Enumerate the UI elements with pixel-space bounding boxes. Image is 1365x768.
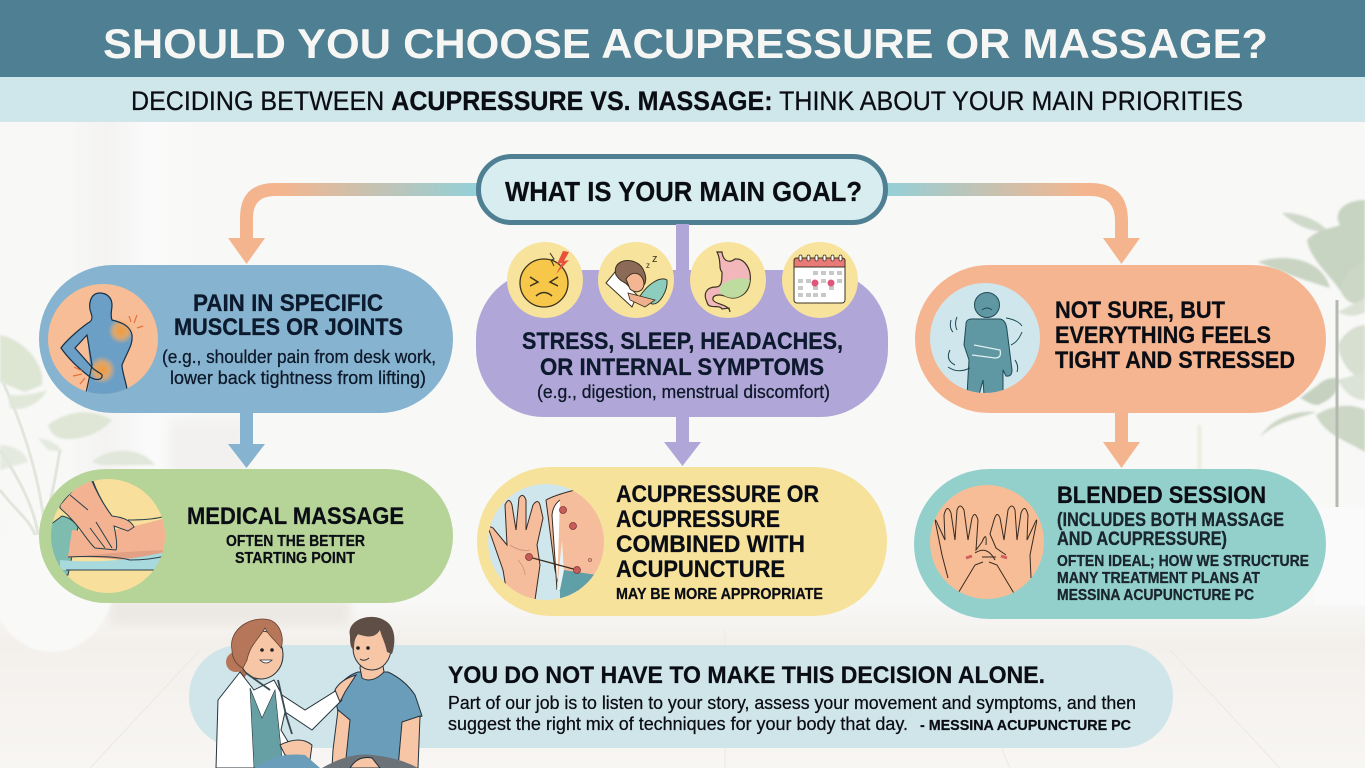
icon: person sleeping (598, 242, 674, 318)
blended heading: AND ACUPRESSURE) (1057, 528, 1227, 550)
icon: person sleeping: z (646, 261, 650, 270)
pain examples (162, 346, 436, 388)
pain heading: MUSCLES OR JOINTS (174, 314, 403, 341)
icon: body with pain spots (48, 284, 158, 395)
acupressure heading: ACUPRESSURE OR (616, 481, 819, 508)
subtitle banner (0, 77, 1365, 122)
acupressure note: MAY BE MORE APPROPRIATE (616, 586, 823, 603)
title banner (0, 0, 1365, 77)
illustration: practitioner and patient (216, 617, 422, 768)
panel: closing callout (189, 617, 1173, 768)
stress heading (522, 328, 843, 381)
panel: acupressure or acupressure combined with acupuncture (477, 467, 887, 616)
blended heading: BLENDED SESSION (1057, 482, 1266, 509)
arrow: not sure to blended session (1103, 410, 1140, 468)
callout body: suggest the right mix of techniques for your body that day. (448, 714, 908, 734)
pain heading (174, 290, 403, 341)
blended note: OFTEN IDEAL; HOW WE STRUCTURE (1057, 553, 1309, 570)
panel: pain in specific muscles or joints (39, 265, 453, 413)
medical massage note: OFTEN THE BETTER (226, 533, 365, 550)
icon: tense figure (930, 283, 1040, 395)
pain examples: (e.g., shoulder pain from desk work, (162, 346, 436, 367)
arrow: goal to pain branch (228, 183, 478, 264)
pain heading: PAIN IN SPECIFIC (193, 290, 383, 317)
blended heading (1057, 482, 1284, 550)
acupressure heading (616, 481, 819, 583)
arrow: pain to medical massage (228, 410, 265, 468)
panel: stress, sleep, headaches or internal symptoms (476, 224, 888, 417)
acupressure heading: ACUPUNCTURE (616, 556, 785, 583)
acupressure heading: ACUPRESSURE (616, 506, 780, 533)
icon: headache face (507, 242, 583, 318)
icon: stomach (690, 242, 766, 318)
panel: blended session (914, 469, 1326, 619)
medical massage note (226, 533, 365, 567)
icon: menstrual calendar (782, 242, 858, 318)
callout body: Part of our job is to listen to your story, assess your movement and symptoms, and then (448, 693, 1136, 713)
stress heading: STRESS, SLEEP, HEADACHES, (522, 328, 843, 355)
acupressure heading: COMBINED WITH (616, 531, 805, 558)
stress heading: OR INTERNAL SYMPTOMS (540, 354, 824, 381)
medical massage heading: MEDICAL MASSAGE (187, 503, 404, 530)
callout body (448, 693, 1136, 734)
callout heading: YOU DO NOT HAVE TO MAKE THIS DECISION ALONE. (448, 662, 1045, 689)
icon: acupoints on hand and shoulder (488, 484, 610, 600)
icon: massage hands (50, 479, 165, 593)
callout body: - MESSINA ACUPUNCTURE PC (920, 717, 1131, 734)
pain examples: lower back tightness from lifting) (170, 367, 426, 388)
subtitle text: DECIDING BETWEEN ACUPRESSURE VS. MASSAGE: THINK ABOUT YOUR MAIN PRIORITIES (131, 86, 1243, 116)
panel: not sure, everything feels tight and stressed (915, 265, 1326, 413)
arrow: goal to stress branch and acupressure (664, 222, 701, 466)
blended heading: (INCLUDES BOTH MASSAGE (1057, 509, 1284, 531)
not sure heading: TIGHT AND STRESSED (1055, 347, 1295, 374)
not sure heading: EVERYTHING FEELS (1055, 322, 1271, 349)
medical massage note: STARTING POINT (235, 550, 355, 567)
title text: SHOULD YOU CHOOSE ACUPRESSURE OR MASSAGE? (103, 20, 1268, 67)
not sure heading: NOT SURE, BUT (1055, 297, 1225, 324)
question text: WHAT IS YOUR MAIN GOAL? (505, 176, 862, 207)
question box: main goal (478, 156, 886, 222)
blended note: MANY TREATMENT PLANS AT (1057, 570, 1260, 587)
blended note (1057, 553, 1309, 604)
arrow: goal to not sure branch (886, 183, 1140, 264)
icon: two hands meeting (930, 485, 1044, 599)
stress examples: (e.g., digestion, menstrual discomfort) (537, 382, 830, 402)
not sure heading (1055, 297, 1295, 374)
icon: person sleeping: z (652, 253, 658, 265)
blended note: MESSINA ACUPUNCTURE PC (1057, 587, 1254, 604)
panel: medical massage (39, 469, 453, 603)
